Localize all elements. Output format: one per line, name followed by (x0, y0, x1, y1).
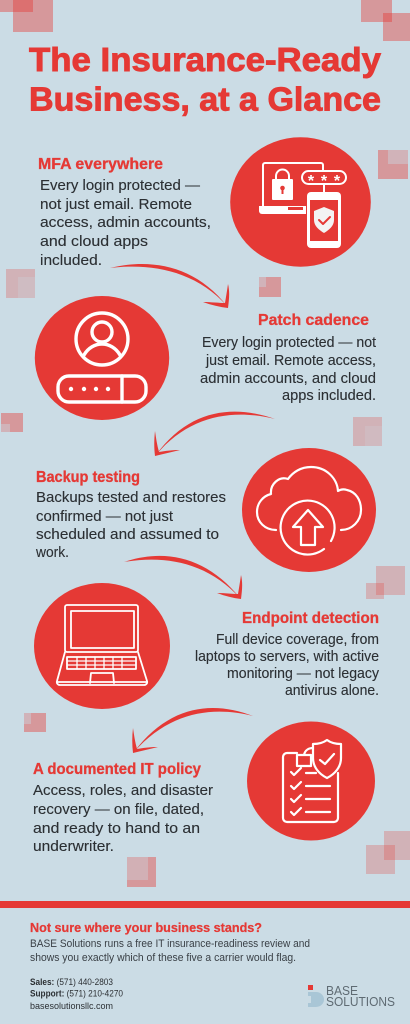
text block: contact details: basesolutionsllc.com (30, 1001, 113, 1011)
arrow: endpoint detection to IT policy (132, 708, 253, 753)
text block: Endpoint description: monitoring — not legacy (227, 666, 380, 682)
text block: Endpoint description: laptops to servers, with active (195, 649, 379, 665)
text block: MFA description: not just email. Remote (40, 197, 192, 213)
text block: IT policy description: underwriter. (33, 839, 114, 855)
heading: Endpoint detection: Endpoint detection (242, 610, 379, 627)
footer band (0, 901, 410, 908)
arrow: patch cadence to backup testing (154, 412, 275, 456)
text block: review offer (30, 938, 310, 964)
text block: IT policy description: recovery — on file, dated, (33, 802, 204, 818)
text block: Backup description: scheduled and assumed to (36, 527, 219, 543)
heading: MFA everywhere: MFA everywhere (38, 156, 163, 173)
heading: Backup testing: Backup testing (36, 469, 140, 486)
text block: contact details (30, 977, 123, 1011)
icon: laptop, password and phone shield: * (321, 173, 328, 190)
text block: Patch description: apps included. (282, 388, 376, 404)
icon: cloud upload (242, 448, 376, 572)
text block: Patch description: admin accounts, and cloud (200, 371, 376, 387)
text block: Patch description: just email. Remote access, (205, 353, 376, 369)
arrow: backup testing to endpoint detection (124, 556, 242, 599)
panel: A documented IT policy (33, 722, 375, 855)
text block: MFA description: access, admin accounts, (40, 215, 211, 231)
text block: IT policy description (33, 783, 213, 855)
text block: Endpoint description: antivirus alone. (285, 683, 379, 699)
text block: Backup description (35, 490, 226, 561)
title (29, 41, 382, 118)
text block: review offer: BASE Solutions runs a free IT insurance-readiness review and (30, 938, 310, 950)
logo: BASE Solutions: SOLUTIONS (326, 994, 395, 1009)
panel: MFA everywhere (38, 137, 371, 269)
panel: Patch cadence (35, 296, 376, 420)
text block: IT policy description: Access, roles, and disaster (33, 783, 213, 799)
text block: contact details: Support: (571) 210-4270 (30, 988, 123, 998)
icon: laptop, password and phone shield: * (308, 173, 315, 190)
text block: Endpoint description (195, 632, 380, 699)
text block: MFA description: included. (40, 253, 102, 269)
panel: call to action (30, 920, 310, 1011)
text block: MFA description (40, 178, 211, 269)
logo: BASE Solutions (308, 983, 395, 1009)
text block: Backup description: Backups tested and restores (36, 490, 226, 506)
text block: Backup description: work. (35, 545, 69, 561)
panel: Backup testing (35, 448, 376, 572)
text block: review offer: shows you exactly which of these five a carrier would flag. (30, 952, 296, 964)
text block: MFA description: Every login protected — (40, 178, 201, 194)
text block: MFA description: and cloud apps (40, 234, 148, 250)
logo: BASE Solutions: BASE (326, 983, 358, 998)
icon: laptop, password and phone shield: * (334, 173, 341, 190)
heading: Patch cadence: Patch cadence (258, 312, 369, 329)
text block: Backup description: confirmed — not just (36, 509, 173, 525)
text block: Endpoint description: Full device coverage, from (216, 632, 379, 648)
heading: A documented IT policy: A documented IT policy (33, 761, 201, 778)
heading: call to action: Not sure where your business stands? (30, 920, 262, 935)
icon: laptop, password and phone shield (230, 137, 371, 267)
text block: Patch description: Every login protected — not (202, 335, 376, 351)
icon: laptop (34, 583, 170, 709)
text block: contact details: Sales: (571) 440-2803 (30, 977, 113, 987)
arrow: MFA to patch cadence (110, 264, 229, 308)
icon: user and password field (35, 296, 169, 420)
text block: Patch description (200, 335, 376, 404)
panel: Endpoint detection (34, 583, 380, 709)
text block: IT policy description: and ready to hand to an (33, 821, 200, 837)
icon: checklist and shield (247, 722, 375, 840)
title: Business, at a Glance (29, 80, 381, 118)
title: The Insurance-Ready (29, 41, 382, 78)
